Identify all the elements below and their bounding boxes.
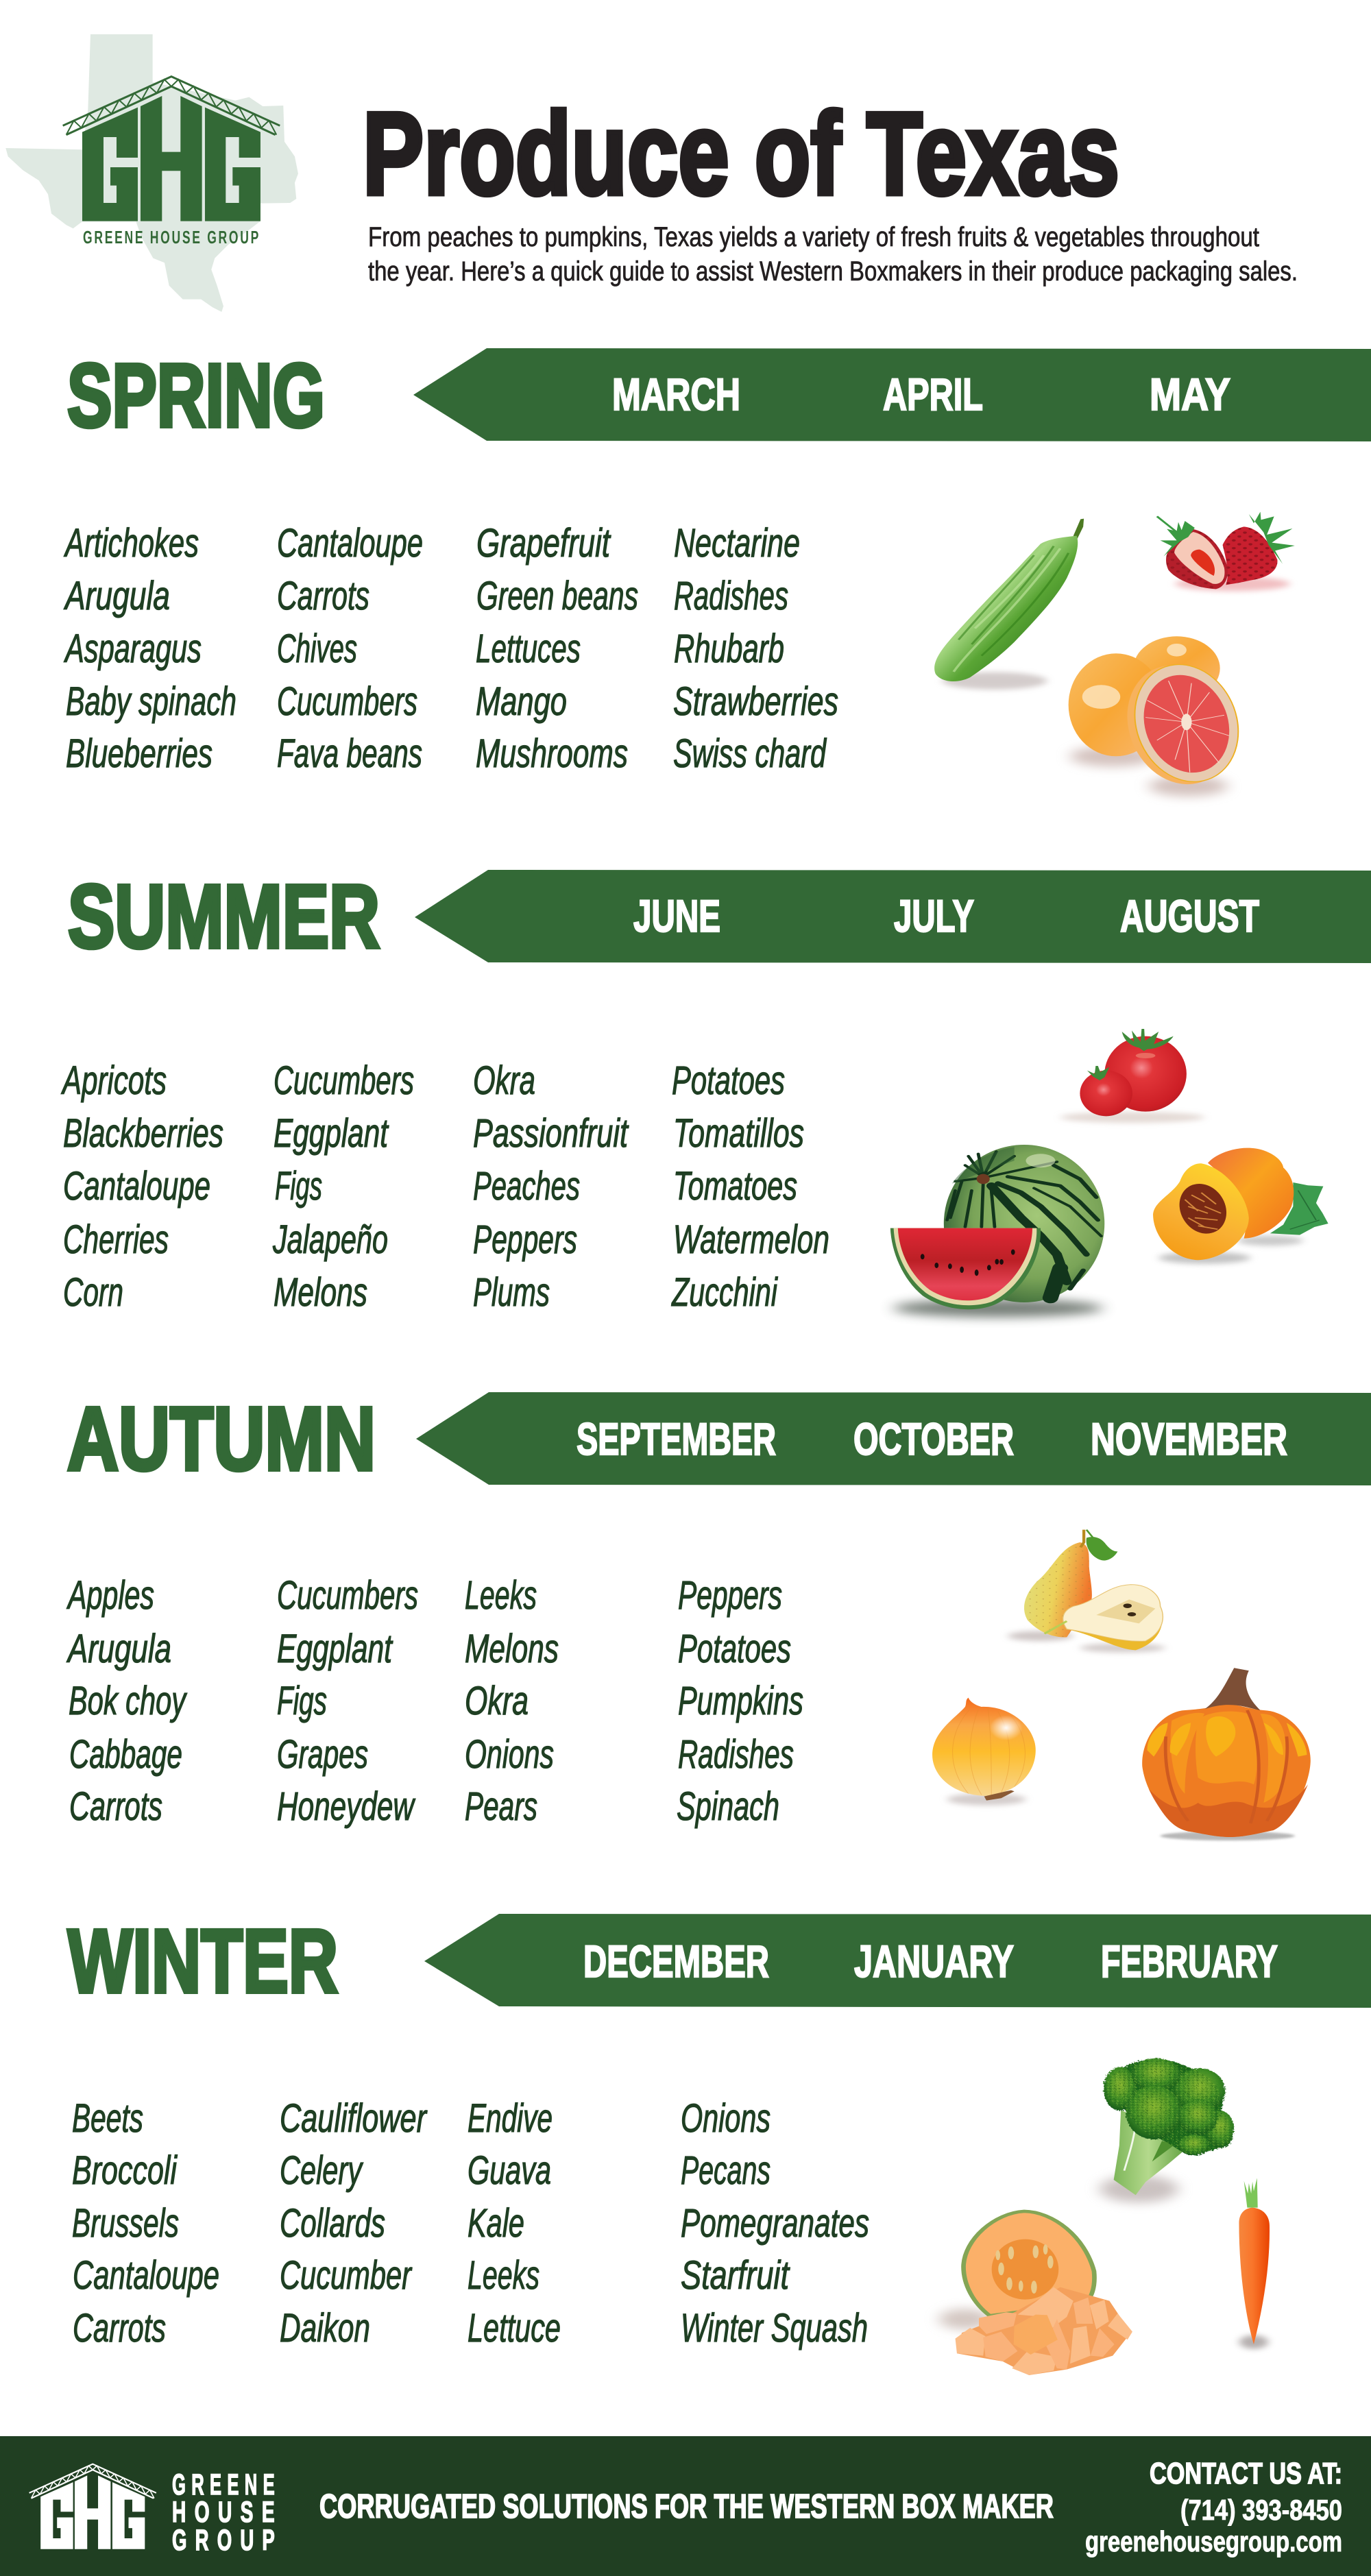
month ribbon: summer: JUNE [633,890,720,941]
icon: strawberries [1157,512,1295,591]
icon: GHG house mark [63,77,280,221]
heading: winter: WINTER [68,1910,338,2011]
produce list: summer: Corn [63,1270,123,1315]
produce list: spring: Carrots [277,574,369,618]
produce list: autumn: Cucumbers [277,1573,418,1618]
produce list: autumn: Potatoes [678,1627,791,1671]
produce list: winter: Celery [280,2148,363,2193]
produce list: autumn: Figs [277,1679,327,1723]
produce list: spring: Nectarine [674,521,800,566]
produce list: summer: Potatoes [672,1058,785,1103]
produce list: spring [64,521,838,776]
produce list: autumn: Leeks [465,1573,537,1618]
produce list: spring: Artichokes [64,521,199,566]
month ribbon: autumn: OCTOBER [853,1413,1014,1464]
produce list: autumn: Okra [465,1679,529,1723]
produce list: summer: Figs [275,1164,322,1208]
produce list: summer: Blackberries [63,1111,223,1156]
produce list: summer: Cherries [63,1217,169,1262]
footer wordmark: GROUP [172,2524,283,2557]
panel: winter [68,1910,1371,2375]
month ribbon: winter: FEBRUARY [1101,1936,1278,1986]
logo: Greene House Group on Texas [5,34,298,312]
produce illustrations: winter [939,2058,1270,2375]
produce list: spring: Cantaloupe [277,521,423,566]
produce list: summer: Peaches [473,1164,580,1208]
logo wordmark: GREENE HOUSE GROUP [83,227,260,247]
produce list: winter: Endive [468,2096,553,2141]
icon: cucumber [934,519,1084,690]
title: Produce of Texas [363,88,1119,219]
month ribbon: summer: JULY [894,890,974,941]
heading: summer: SUMMER [68,866,380,967]
icon: tomatoes [1060,1029,1204,1123]
produce list: spring: Fava beans [277,731,422,776]
produce list: winter: Guava [468,2148,551,2193]
produce illustrations: autumn [932,1530,1311,1840]
produce list: spring: Mushrooms [476,731,628,776]
produce illustrations: summer [890,1029,1328,1317]
produce list: summer: Cucumbers [274,1058,414,1103]
produce list: winter: Lettuce [468,2306,561,2350]
icon: cantaloupe [939,2211,1132,2375]
month ribbon: autumn: SEPTEMBER [577,1413,776,1464]
produce list: winter [72,2096,869,2350]
produce list: autumn: Radishes [678,1732,794,1777]
produce list: winter: Kale [468,2201,524,2246]
produce list: winter: Carrots [73,2306,166,2350]
footer wordmark: GREENE [172,2468,280,2501]
produce list: winter: Brussels [72,2201,179,2246]
produce list: spring: Cucumbers [277,679,417,724]
intro text [368,222,1298,287]
produce list: winter: Winter Squash [681,2306,868,2350]
month ribbon: winter [424,1914,1371,2008]
footer tagline: CORRUGATED SOLUTIONS FOR THE WESTERN BOX MAKER [319,2488,1054,2525]
produce list: winter: Leeks [468,2253,539,2298]
footer wordmark: HOUSE [172,2496,283,2529]
produce list: winter: Collards [280,2201,385,2246]
produce list: spring: Rhubarb [674,627,784,671]
produce list: autumn: Carrots [69,1784,162,1829]
produce list: winter: Daikon [280,2306,370,2350]
produce list: autumn [66,1573,803,1829]
produce list: winter: Broccoli [72,2148,178,2193]
produce list: spring: Lettuces [476,627,581,671]
produce list: autumn: Arugula [66,1627,171,1671]
produce list: autumn: Cabbage [69,1732,182,1777]
produce list: winter: Cantaloupe [73,2253,219,2298]
icon: peach [1153,1148,1328,1264]
produce list: summer: Tomatillos [673,1111,804,1156]
produce illustrations: spring [934,512,1295,797]
produce list: autumn: Melons [465,1627,559,1671]
month ribbon: spring: APRIL [883,369,983,420]
produce list: summer: Watermelon [673,1217,829,1262]
produce list: summer: Jalapeño [272,1217,388,1262]
produce list: summer: Tomatoes [673,1164,797,1208]
month ribbon: summer [415,870,1371,963]
produce list: summer: Zucchini [671,1270,778,1315]
produce list: spring: Baby spinach [66,679,236,724]
produce list: summer: Cantaloupe [63,1164,210,1208]
produce list: autumn: Apples [66,1573,154,1618]
produce list: winter: Pecans [681,2148,771,2193]
produce list: autumn: Eggplant [277,1627,393,1671]
produce list: spring: Chives [277,627,357,671]
month ribbon: winter: JANUARY [854,1936,1014,1986]
produce list: winter: Cucumber [280,2253,413,2298]
produce list: spring: Blueberries [66,731,213,776]
produce list: summer: Eggplant [274,1111,389,1156]
produce list: summer [61,1058,829,1315]
month ribbon: winter: DECEMBER [583,1936,769,1986]
produce list: spring: Green beans [476,574,638,618]
produce list: summer: Apricots [61,1058,167,1103]
footer logo mark [29,2464,156,2549]
contact details [1085,2457,1342,2557]
icon: grapefruit [1069,636,1249,797]
produce list: winter: Pomegranates [681,2201,869,2246]
heading: spring: SPRING [67,345,325,446]
panel: spring [64,345,1371,797]
produce list: summer: Okra [473,1058,535,1103]
footer band [0,2436,1371,2576]
produce list: spring: Swiss chard [673,731,827,776]
produce list: spring: Strawberries [673,679,838,724]
produce list: spring: Asparagus [64,627,202,671]
produce list: autumn: Grapes [277,1732,368,1777]
icon: watermelon [890,1145,1104,1317]
produce list: autumn: Pumpkins [678,1679,803,1723]
icon: pumpkin [1142,1668,1311,1840]
produce list: autumn: Peppers [678,1573,782,1618]
produce list: spring: Arugula [64,574,170,618]
produce list: winter: Cauliflower [280,2096,428,2141]
month ribbon: spring: MARCH [612,369,740,420]
produce list: autumn: Bok choy [69,1679,187,1723]
icon: onion [932,1698,1036,1806]
heading: autumn: AUTUMN [67,1388,376,1489]
produce list: spring: Mango [476,679,567,724]
produce list: autumn: Honeydew [277,1784,415,1829]
month ribbon: autumn: NOVEMBER [1091,1413,1287,1464]
produce list: summer: Melons [274,1270,367,1315]
month ribbon: spring [413,348,1371,441]
produce list: autumn: Pears [465,1784,537,1829]
produce list: summer: Passionfruit [473,1111,629,1156]
icon: Texas silhouette [5,34,298,312]
produce list: summer: Peppers [473,1217,577,1262]
produce list: winter: Starfruit [681,2253,790,2298]
produce list: spring: Radishes [674,574,788,618]
month ribbon: spring: MAY [1150,369,1230,420]
produce list: spring: Grapefruit [476,521,611,566]
footer wordmark [172,2468,283,2557]
produce list: winter: Beets [72,2096,143,2141]
month ribbon: autumn [416,1392,1371,1485]
melon cubes [956,2287,1132,2375]
month ribbon: summer: AUGUST [1120,890,1259,941]
icon: carrot [1239,2178,1270,2349]
panel: autumn [66,1388,1371,1840]
produce list: winter: Onions [681,2096,771,2141]
panel: summer [61,866,1371,1317]
produce list: summer: Plums [473,1270,550,1315]
icon: pears [1008,1530,1165,1653]
produce list: autumn: Spinach [677,1784,779,1829]
icon: broccoli [1100,2058,1234,2202]
produce list: autumn: Onions [465,1732,554,1777]
